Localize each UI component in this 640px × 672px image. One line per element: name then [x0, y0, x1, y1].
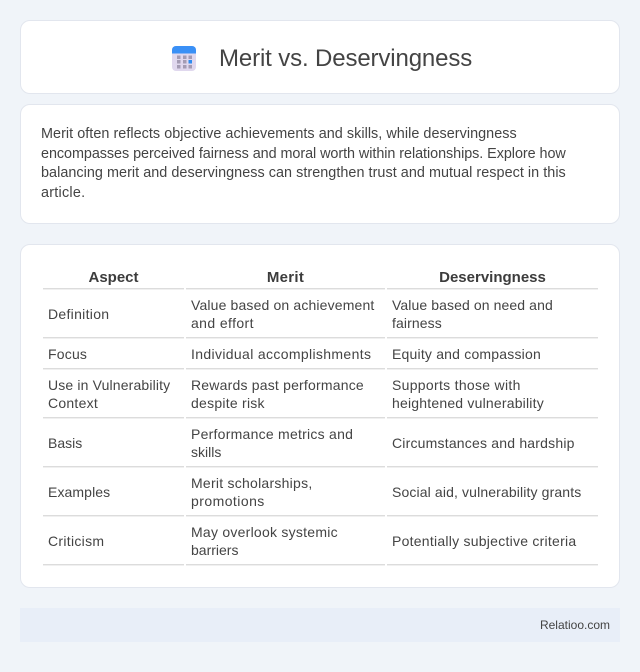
row: criticism — [48, 524, 576, 558]
icon: calendar — [172, 46, 196, 71]
intro card — [20, 104, 620, 224]
row: definition: Definition — [48, 306, 109, 322]
intro text — [41, 126, 566, 200]
table header: Deservingness — [439, 269, 546, 286]
row: criticism: Criticism — [48, 533, 104, 549]
row: basis: skills — [191, 444, 221, 460]
row: criticism: barriers — [191, 542, 238, 558]
row: use in vulnerability context: Context — [48, 395, 98, 411]
row: basis: Circumstances and hardship — [392, 435, 575, 451]
row: definition: Value based on need and — [392, 297, 553, 313]
row: focus — [48, 346, 541, 362]
row: examples: promotions — [191, 493, 265, 509]
row: use in vulnerability context — [48, 377, 544, 411]
row: definition: fairness — [392, 315, 442, 331]
intro text: article. — [41, 184, 85, 200]
row: basis: Basis — [48, 435, 82, 451]
row: definition: and effort — [191, 315, 254, 331]
row: examples — [48, 475, 581, 509]
row lines — [43, 288, 598, 566]
intro text: Merit often reflects objective achievements and skills, while deservingness — [41, 126, 517, 142]
footer text: Relatioo.com — [540, 618, 610, 632]
footer bar — [20, 608, 620, 642]
title: Merit vs. Deservingness — [219, 45, 472, 72]
row: examples: Examples — [48, 484, 110, 500]
row: basis — [48, 426, 575, 460]
intro text: balancing merit and deservingness can strengthen trust and mutual respect in this — [41, 165, 566, 181]
row: basis: Performance metrics and — [191, 426, 353, 442]
row: focus: Equity and compassion — [392, 346, 541, 362]
row: criticism: May overlook systemic — [191, 524, 338, 540]
row: use in vulnerability context: heightened vulnerability — [392, 395, 544, 411]
row: focus: Individual accomplishments — [191, 346, 371, 362]
row: definition — [48, 297, 553, 331]
row: focus: Focus — [48, 346, 87, 362]
table card — [20, 244, 620, 588]
row: use in vulnerability context: despite risk — [191, 395, 265, 411]
row: examples: Merit scholarships, — [191, 475, 312, 491]
row: definition: Value based on achievement — [191, 297, 374, 313]
table header — [88, 269, 546, 286]
row: use in vulnerability context: Supports those with — [392, 377, 521, 393]
row: examples: Social aid, vulnerability grants — [392, 484, 581, 500]
table header: Aspect — [88, 269, 139, 286]
row: use in vulnerability context: Use in Vulnerability — [48, 377, 170, 393]
intro text: encompasses perceived fairness and moral worth within relationships. Explore how — [41, 146, 566, 162]
table header: Merit — [267, 269, 304, 286]
row: criticism: Potentially subjective criteria — [392, 533, 576, 549]
header card — [20, 20, 620, 94]
row: use in vulnerability context: Rewards past performance — [191, 377, 364, 393]
